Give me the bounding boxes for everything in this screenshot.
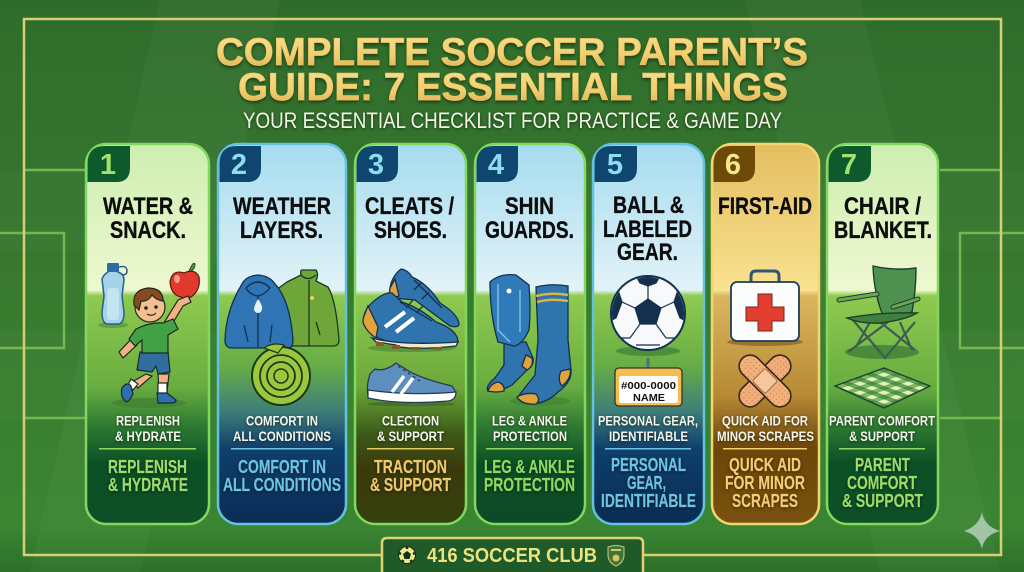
icon: shin guard and sock xyxy=(487,275,533,392)
heading xyxy=(365,193,454,244)
icon: back cleat xyxy=(390,269,459,327)
icon: long sock xyxy=(510,285,571,406)
heading: FIRST-AID xyxy=(718,193,812,220)
icon: blue jacket xyxy=(225,275,293,348)
panel: 3 cleats and shoes xyxy=(355,144,466,524)
panel: 6 first aid xyxy=(712,144,819,524)
number badge 5 xyxy=(594,146,637,182)
benefit: GEAR, xyxy=(627,473,666,493)
panel: 2 weather layers xyxy=(218,144,346,524)
heading: BLANKET. xyxy=(834,217,932,244)
caption xyxy=(115,414,181,444)
heading xyxy=(485,193,574,244)
heading xyxy=(233,193,331,244)
caption: & HYDRATE xyxy=(115,429,181,444)
benefit: TRACTION xyxy=(374,457,447,477)
number badge 5: 5 xyxy=(607,149,623,181)
number badge 3 xyxy=(356,146,398,182)
heading: GEAR. xyxy=(617,239,678,266)
icon: apple xyxy=(170,263,199,298)
caption: PERSONAL GEAR, xyxy=(598,414,698,428)
number badge 3: 3 xyxy=(368,149,384,181)
benefit: ALL CONDITIONS xyxy=(223,475,341,495)
benefit: LEG & ANKLE xyxy=(484,457,575,477)
heading xyxy=(103,193,193,244)
icon: checked blanket xyxy=(835,368,930,408)
benefit: & SUPPORT xyxy=(842,491,923,511)
caption xyxy=(829,414,936,444)
icon: folding chair xyxy=(839,266,919,359)
caption: ALL CONDITIONS xyxy=(233,429,331,444)
benefit xyxy=(108,457,188,495)
benefit xyxy=(601,455,696,511)
title: GUIDE: 7 ESSENTIAL THINGS xyxy=(238,66,788,109)
title xyxy=(216,31,808,109)
heading: SHOES. xyxy=(374,217,447,244)
caption: LEG & ANKLE xyxy=(492,414,567,428)
icon: sparkle xyxy=(964,512,1000,549)
icon: child xyxy=(112,288,191,408)
caption: MINOR SCRAPES xyxy=(717,429,814,444)
heading: LAYERS. xyxy=(240,217,323,244)
icon: crossed bandages xyxy=(735,351,795,411)
heading: WATER & xyxy=(103,193,193,220)
number badge 6: 6 xyxy=(725,149,741,181)
heading: CLEATS / xyxy=(365,193,454,220)
benefit: SCRAPES xyxy=(732,491,798,511)
heading: BALL & xyxy=(613,192,684,219)
heading xyxy=(834,193,932,244)
benefit: QUICK AID xyxy=(729,455,801,475)
heading: CHAIR / xyxy=(844,193,921,220)
caption xyxy=(492,414,567,444)
benefit: PROTECTION xyxy=(484,475,575,495)
caption: & SUPPORT xyxy=(377,429,445,444)
caption: COMFORT IN xyxy=(246,414,318,428)
benefit: PARENT xyxy=(855,455,910,475)
icon: coiled hose xyxy=(252,344,310,405)
heading xyxy=(603,192,692,266)
benefit: PERSONAL xyxy=(611,455,686,475)
benefit: REPLENISH xyxy=(108,457,187,477)
icon: water bottle xyxy=(98,263,128,328)
heading: SNACK. xyxy=(110,217,186,244)
benefit: & HYDRATE xyxy=(108,475,188,495)
icon: club crest xyxy=(608,546,624,566)
title: COMPLETE SOCCER PARENT’S xyxy=(216,31,808,74)
icon: first aid kit xyxy=(727,271,803,346)
panel: 4 shin guards xyxy=(475,144,585,524)
number badge 1 xyxy=(88,146,130,182)
heading: SHIN xyxy=(505,193,554,220)
panel: 5 ball and labeled gear xyxy=(593,144,704,524)
benefit: FOR MINOR xyxy=(725,473,805,493)
icon: footer ball xyxy=(398,546,416,564)
caption: REPLENISH xyxy=(116,414,180,428)
benefit xyxy=(370,457,451,495)
benefit: IDENTIFIABLE xyxy=(601,491,696,511)
subtitle: YOUR ESSENTIAL CHECKLIST FOR PRACTICE & GAME DAY xyxy=(243,108,782,133)
caption xyxy=(598,414,698,444)
benefit xyxy=(484,457,575,495)
caption: & SUPPORT xyxy=(849,429,916,444)
icon: front cleat xyxy=(363,293,458,352)
footer badge xyxy=(382,538,643,572)
panel: 1 water and snack xyxy=(86,144,209,524)
number badge 7 xyxy=(828,146,871,182)
number badge 6 xyxy=(714,146,755,182)
benefit: & SUPPORT xyxy=(370,475,451,495)
icon: sneaker xyxy=(367,363,456,406)
benefit: COMFORT IN xyxy=(238,457,326,477)
benefit xyxy=(725,455,805,511)
club name: 416 SOCCER CLUB xyxy=(427,544,597,567)
benefit xyxy=(223,457,341,495)
number badge 2: 2 xyxy=(231,149,247,181)
caption: IDENTIFIABLE xyxy=(609,429,688,444)
caption: CLECTION xyxy=(382,414,439,428)
number badge 4 xyxy=(476,146,518,182)
number badge 4: 4 xyxy=(488,149,504,181)
caption: PROTECTION xyxy=(493,429,567,444)
caption: PARENT COMFORT xyxy=(829,414,936,428)
caption: QUICK AID FOR xyxy=(722,414,808,428)
heading: LABELED xyxy=(603,216,692,243)
icon: green jacket xyxy=(276,270,339,346)
panel: 7 chair and blanket xyxy=(827,144,938,524)
caption xyxy=(377,414,445,444)
number badge 1: 1 xyxy=(100,149,116,181)
icon: name tag xyxy=(615,358,682,406)
icon: name tag: #000-0000 xyxy=(621,380,676,392)
benefit xyxy=(842,455,923,511)
number badge 7: 7 xyxy=(841,149,857,181)
icon: name tag: NAME xyxy=(633,392,665,404)
benefit: COMFORT xyxy=(847,473,917,493)
heading: WEATHER xyxy=(233,193,331,220)
caption xyxy=(717,414,814,444)
icon: soccer ball xyxy=(606,276,690,356)
heading: GUARDS. xyxy=(485,217,574,244)
caption xyxy=(233,414,331,444)
number badge 2 xyxy=(220,146,261,182)
